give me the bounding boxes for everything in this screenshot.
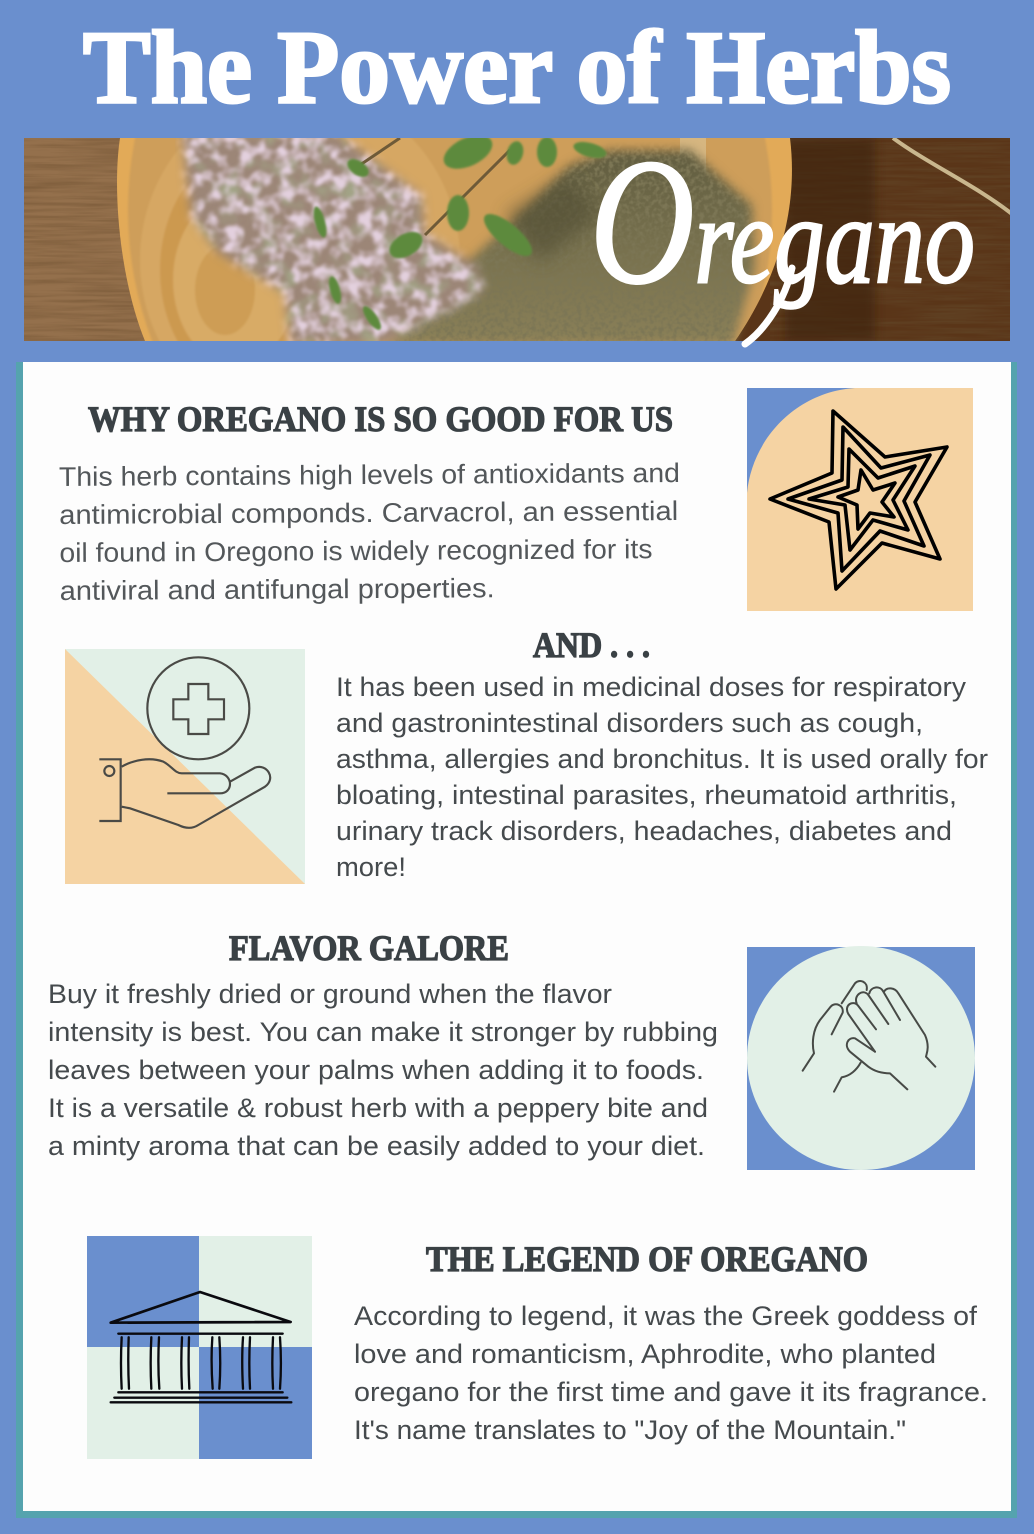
- text: legend paragraph: [354, 1301, 988, 1445]
- text: legend paragraph: love and romanticism, Aphrodite, who planted: [354, 1339, 936, 1369]
- text: medicinal uses paragraph: It has been used in medicinal doses for respiratory: [336, 672, 967, 702]
- icon: layered star on peach square: [747, 388, 973, 611]
- text: legend paragraph: oregano for the first time and gave it its fragrance.: [354, 1377, 988, 1407]
- banner photo: oregano in a wooden bowl: [24, 138, 1010, 341]
- section: and: [336, 625, 988, 882]
- section: why oregano is so good: [59, 399, 681, 606]
- text: legend paragraph: It's name translates to "Joy of the Mountain.": [354, 1415, 906, 1445]
- content panel: [16, 362, 1017, 1518]
- heading: legend: THE LEGEND OF OREGANO: [426, 1239, 868, 1279]
- text: why oregano paragraph: This herb contains high levels of antioxidants and: [59, 458, 680, 492]
- text: flavor paragraph: a minty aroma that can be easily added to your diet.: [48, 1131, 705, 1161]
- dried herb pile: [385, 140, 765, 345]
- icon: hand holding medical cross: [65, 649, 305, 884]
- text: why oregano paragraph: antimicrobial componds. Carvacrol, an essential: [59, 496, 678, 530]
- text: flavor paragraph: Buy it freshly dried or ground when the flavor: [48, 979, 612, 1009]
- text: medicinal uses paragraph: and gastronintestinal disorders such as cough,: [336, 708, 923, 738]
- text: medicinal uses paragraph: urinary track disorders, headaches, diabetes and: [336, 816, 952, 846]
- text: flavor paragraph: intensity is best. You can make it stronger by rubbing: [48, 1017, 718, 1047]
- text: medicinal uses paragraph: asthma, allergies and bronchitus. It is used orally for: [336, 744, 988, 774]
- text: medicinal uses paragraph: more!: [336, 852, 406, 882]
- text: medicinal uses paragraph: [336, 672, 988, 882]
- icon: rubbing hands in circle: [747, 946, 975, 1170]
- text: flavor paragraph: It is a versatile & robust herb with a peppery bite and: [48, 1093, 708, 1123]
- text: flavor paragraph: leaves between your palms when adding it to foods.: [48, 1055, 704, 1085]
- title: The Power of Herbs: [83, 10, 951, 125]
- text: legend paragraph: According to legend, it was the Greek goddess of: [354, 1301, 978, 1331]
- heading: and: AND . . .: [533, 625, 650, 665]
- heading: flavor galore: FLAVOR GALORE: [229, 928, 509, 968]
- heading: why oregano: WHY OREGANO IS SO GOOD FOR US: [88, 399, 673, 439]
- flowers: [175, 132, 495, 347]
- section: flavor galore: [48, 928, 718, 1161]
- icon: greek temple on checkered square: [87, 1236, 312, 1459]
- banner script word: Oregano: Oregano: [590, 122, 975, 321]
- text: flavor paragraph: [48, 979, 718, 1161]
- section: legend of oregano: [354, 1239, 988, 1445]
- text: why oregano paragraph: oil found in Oregono is widely recognized for its: [59, 534, 653, 568]
- text: medicinal uses paragraph: bloating, intestinal parasites, rheumatoid arthritis,: [336, 780, 957, 810]
- text: why oregano paragraph: antiviral and antifungal properties.: [60, 573, 495, 606]
- text: why oregano paragraph: [59, 458, 681, 606]
